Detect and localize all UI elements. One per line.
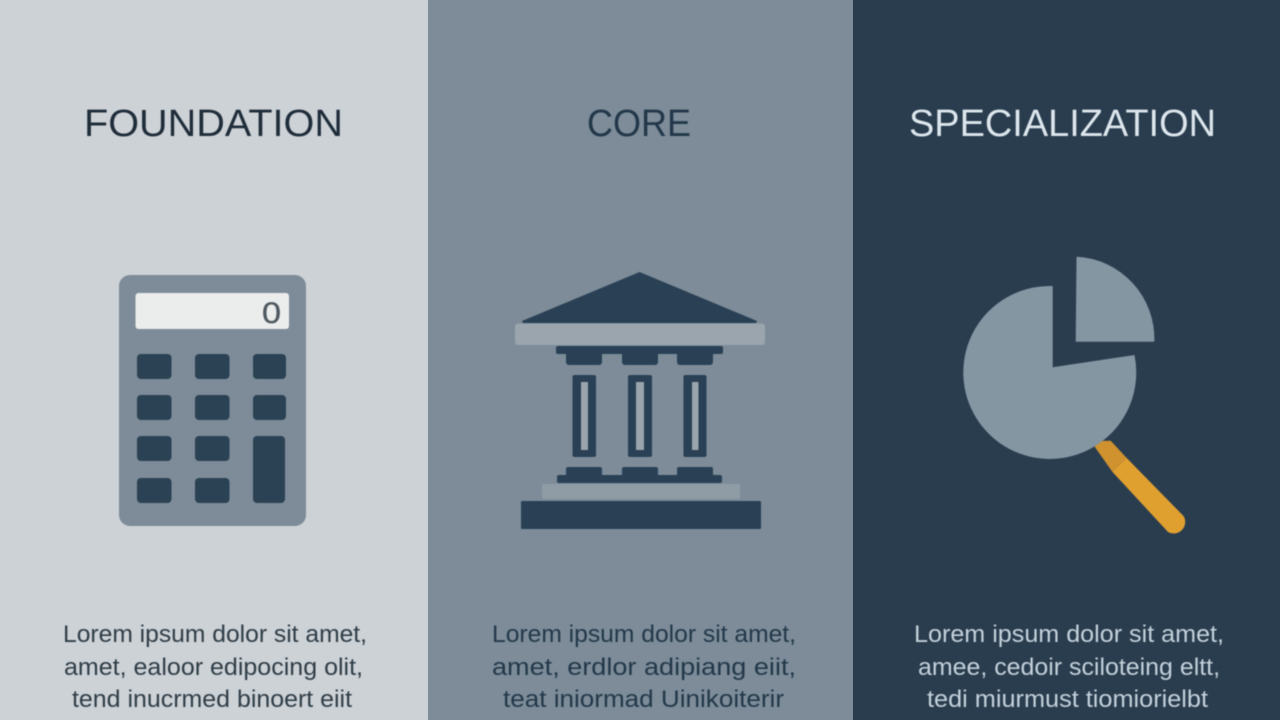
magnifier handle — [1095, 441, 1185, 534]
text block: core description: amet, erdlor adipiang eiit, — [492, 654, 796, 681]
text block: specialization description — [914, 621, 1224, 713]
pie main section — [963, 286, 1136, 459]
text block: foundation description: amet, ealoor edipocing olit, — [64, 654, 363, 681]
text block: foundation description — [63, 621, 367, 713]
text block: foundation description: tend inucrmed binoert eiit — [72, 686, 352, 713]
icon: pie chart with magnifier — [963, 257, 1185, 534]
icon: calculator: 0 — [262, 297, 281, 330]
text block: foundation description: Lorem ipsum dolor sit amet, — [63, 621, 367, 648]
text block: specialization description: tedi miurmust tiomiorielbt — [927, 686, 1208, 713]
icon: calculator — [119, 275, 306, 526]
text block: core description: Lorem ipsum dolor sit amet, — [492, 621, 796, 648]
heading: core: CORE — [587, 103, 691, 145]
text block: core description — [492, 621, 796, 713]
panel: specialization — [853, 0, 1280, 720]
text block: specialization description: Lorem ipsum dolor sit amet, — [914, 621, 1224, 648]
panel: foundation — [0, 0, 428, 720]
icon: bank building — [515, 272, 765, 529]
panel: core — [428, 0, 853, 720]
text block: specialization description: amee, cedoir sciloteing eltt, — [918, 654, 1220, 681]
heading: foundation: FOUNDATION — [84, 103, 343, 145]
heading: specialization: SPECIALIZATION — [909, 103, 1216, 145]
pie detached slice — [1076, 257, 1154, 342]
text block: core description: teat iniormad Uinikoiterir — [503, 686, 784, 713]
